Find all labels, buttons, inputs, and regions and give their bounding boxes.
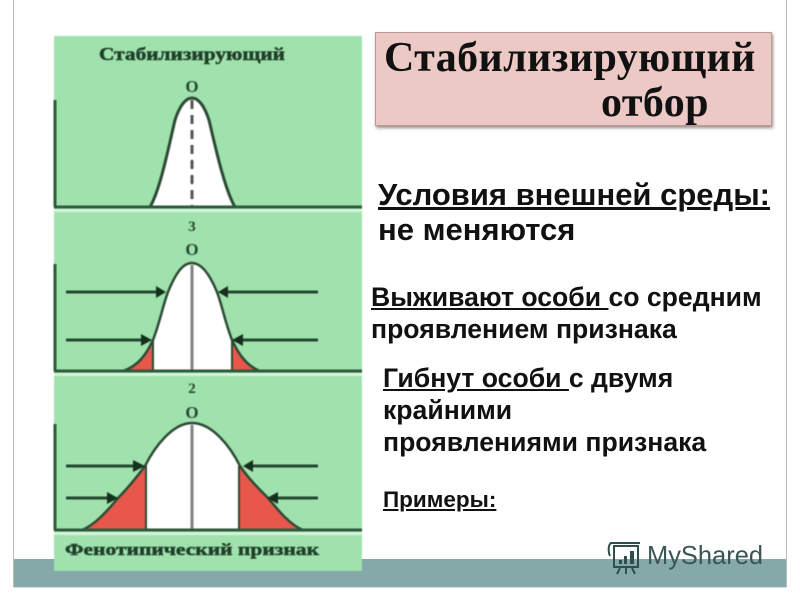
chart 2: medium curve: О [185, 240, 199, 259]
text: survivors: Выживают особи со средним [371, 282, 762, 312]
text: environment conditions: не меняются [378, 212, 575, 247]
chart 3: wide curve: 2 [188, 381, 196, 397]
text: perishing [383, 363, 706, 457]
axis label: Фенотипический признак [65, 540, 319, 559]
chart 3: wide curve: О [185, 403, 199, 422]
logo: MyShared: MyShared [647, 540, 763, 570]
arrows [66, 292, 318, 340]
arrows [66, 466, 318, 498]
text: environment conditions [378, 177, 770, 247]
panel: selection charts [54, 36, 362, 571]
text: perishing: крайними [383, 395, 512, 425]
chart 1: narrow curve: О [185, 77, 199, 96]
text: examples: Примеры: [383, 487, 496, 512]
title box: отбор [601, 80, 709, 126]
text: environment conditions: Условия внешней среды: [378, 177, 770, 212]
text: perishing: Гибнут особи с двумя [383, 363, 673, 393]
chart heading: Стабилизирующий [99, 44, 285, 64]
text: survivors [371, 282, 762, 344]
logo: MyShared [609, 540, 763, 574]
title box [375, 32, 772, 126]
footer bar [14, 559, 786, 587]
title box: Стабилизирующий [384, 35, 756, 81]
chart 2: medium curve: 3 [188, 219, 196, 235]
chart 3: wide curve [54, 381, 362, 535]
text: perishing: проявлениями признака [383, 427, 706, 457]
text: survivors: проявлением признака [371, 314, 677, 344]
chart 2: medium curve [54, 219, 362, 376]
chart 1: narrow curve [54, 77, 362, 212]
